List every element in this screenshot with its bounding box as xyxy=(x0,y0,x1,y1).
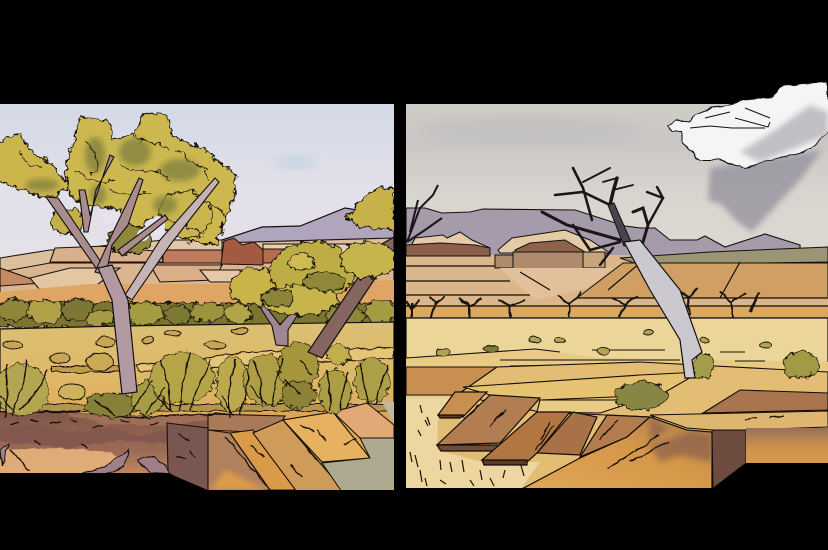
grey sky xyxy=(406,104,828,254)
distant purple mountains xyxy=(222,207,394,242)
small bushes on plain xyxy=(436,329,772,356)
shadow on cliff xyxy=(645,418,712,462)
orange lower strip xyxy=(406,306,828,318)
cloud outlines xyxy=(690,108,770,128)
green vegetation band xyxy=(0,299,402,327)
exposed roots xyxy=(0,443,172,474)
olive rim xyxy=(620,247,828,265)
trunk xyxy=(98,265,137,394)
pale dry riverbed xyxy=(406,398,540,490)
left panel-edge dead branches xyxy=(407,185,442,242)
main tree xyxy=(0,113,235,394)
pale mesa caps xyxy=(410,230,610,253)
grass in riverbed xyxy=(410,405,524,486)
soil bank xyxy=(0,410,208,490)
shrub: trunk base xyxy=(693,353,713,379)
mesa layer lines xyxy=(406,262,828,318)
dead tree xyxy=(407,168,702,378)
base under cut slopes xyxy=(213,412,394,468)
large foreground cliff xyxy=(520,417,712,490)
cloud xyxy=(668,83,828,168)
trunk xyxy=(308,237,394,358)
mesa base xyxy=(406,255,828,320)
distant mountains xyxy=(406,208,800,262)
middle tree xyxy=(230,242,396,346)
branches xyxy=(542,168,663,265)
centre mesa cap xyxy=(515,240,585,252)
orange slope xyxy=(577,263,828,298)
pale mesa caps xyxy=(100,240,222,252)
left orange ledge xyxy=(406,367,497,395)
sky xyxy=(0,104,394,274)
canopy xyxy=(0,113,235,254)
cliff top rim xyxy=(650,411,828,430)
meadow terrace lines and patches xyxy=(3,328,394,411)
trunk xyxy=(260,304,298,347)
plain terrace lines xyxy=(406,349,828,385)
cut soil block xyxy=(167,412,370,493)
right background tree xyxy=(308,186,394,358)
cliff crack marks xyxy=(465,405,784,468)
limbs xyxy=(46,155,219,300)
canopy xyxy=(230,242,396,315)
yellow meadow xyxy=(0,322,394,420)
brown ledge slabs xyxy=(437,392,650,465)
cloud shading xyxy=(740,105,828,162)
left mesa cap xyxy=(406,243,490,256)
orange foreground plain xyxy=(0,280,394,330)
sky gaps xyxy=(137,216,165,241)
illustration: two landscape panels xyxy=(0,81,828,490)
mesa cliff blocks xyxy=(495,252,605,269)
canopy xyxy=(346,186,394,230)
lower trunk xyxy=(624,240,702,378)
lower plain tier xyxy=(406,350,828,405)
panel: lush landscape xyxy=(0,104,402,500)
dark cut face xyxy=(712,430,746,488)
red butte xyxy=(163,238,293,265)
cloud body xyxy=(668,83,828,168)
canopy shading xyxy=(25,137,200,214)
shrub stems xyxy=(0,352,388,418)
right cut face xyxy=(746,428,828,463)
mid orange terraces xyxy=(457,362,828,417)
leaf outlines xyxy=(20,135,225,235)
shrub: right xyxy=(783,352,819,378)
shrub: centre xyxy=(615,382,667,410)
pale plain xyxy=(406,318,828,400)
orange wash on cut block xyxy=(210,470,268,490)
upper trunk xyxy=(608,203,632,246)
peach mound xyxy=(333,403,394,438)
pale strip at panel edge xyxy=(382,402,394,424)
shrubs row xyxy=(0,342,390,417)
watercolor cloud wash xyxy=(472,123,589,130)
mesa bands xyxy=(0,238,394,292)
dark shrub foreground xyxy=(615,352,819,410)
soil speckle marks xyxy=(0,412,357,490)
grey water xyxy=(322,438,396,492)
dark tree line xyxy=(406,288,760,322)
base ground fill xyxy=(406,258,828,493)
panel: drought landscape xyxy=(406,104,828,493)
rain shaft xyxy=(708,150,822,232)
pale talus xyxy=(500,268,613,300)
sky wash xyxy=(273,155,317,169)
